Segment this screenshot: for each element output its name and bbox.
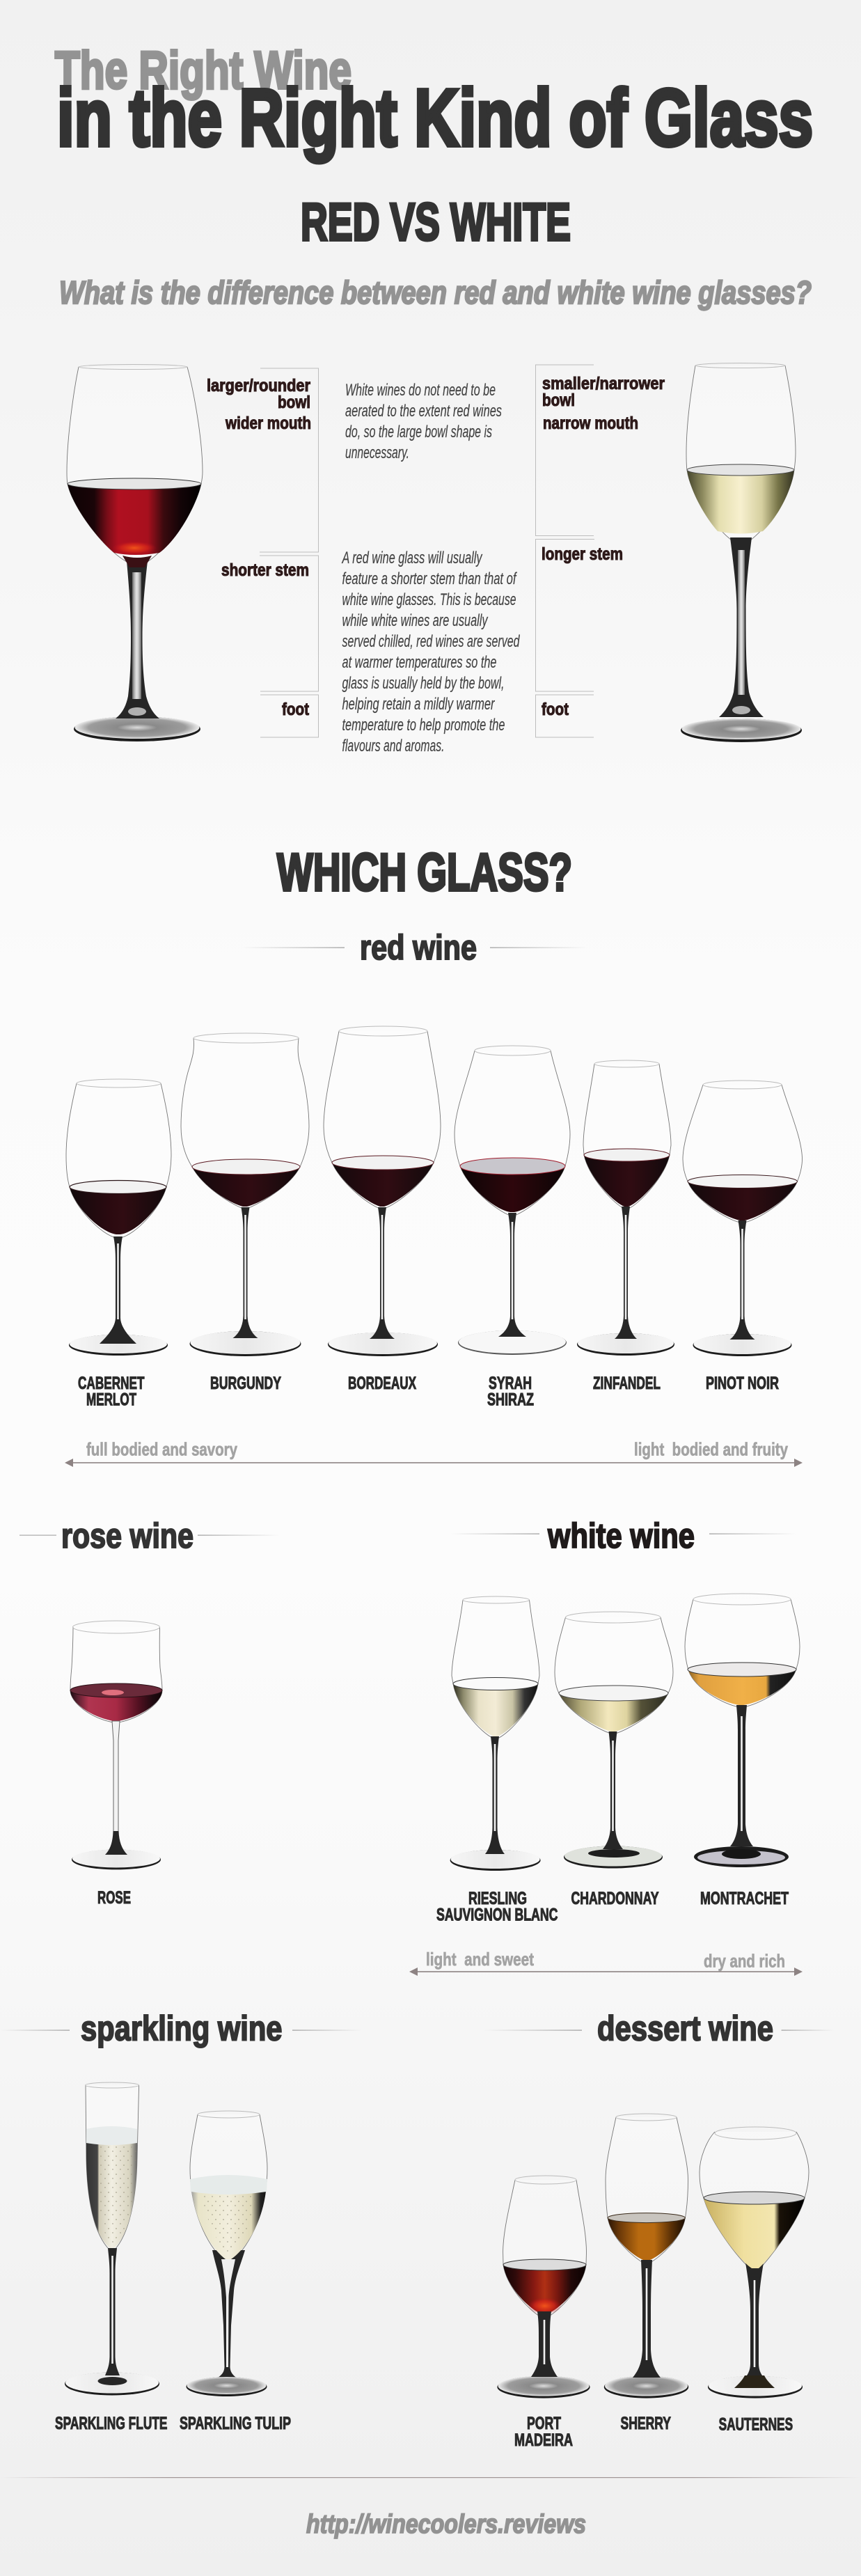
scale arrow: white wine sweetness (409, 1949, 803, 1976)
callout brackets: red glass (260, 368, 319, 737)
callout text: bowl and mouth of red glass: larger/rounder (207, 376, 310, 395)
heading: dessert wine: dessert wine (597, 2009, 773, 2048)
heading: red vs white: RED VS WHITE (301, 193, 571, 252)
text block: red wine stem explanation: feature a shorter stem than that of (342, 570, 517, 588)
callout text: foot of red glass: foot (282, 700, 310, 719)
callout text: bowl and mouth of white glass: smaller/narrower (542, 374, 665, 393)
title line: The Right Wine: The Right Wine (55, 41, 351, 100)
panel: red wine (65, 928, 803, 1467)
labels: red wine glasses: MERLOT (86, 1390, 136, 1409)
glass: cabernet merlot (66, 1079, 171, 1356)
text block: red wine stem explanation: temperature to help promote the (342, 716, 505, 735)
heading: red wine: red wine (360, 928, 477, 967)
text block: white wine bowl explanation (345, 381, 502, 462)
text block: white wine bowl explanation: do, so the large bowl shape is (345, 423, 492, 441)
scale arrow: white wine sweetness: dry and rich (704, 1951, 785, 1972)
labels: red wine glasses: CABERNET (78, 1374, 145, 1393)
heading: rose wine: rose wine (61, 1516, 193, 1555)
labels: white wine glasses: RIESLING (468, 1889, 527, 1908)
text block: white wine bowl explanation: White wines do not need to be (345, 381, 496, 400)
callout text: longer stem: longer stem (542, 544, 623, 564)
callout text: foot of white glass: foot (542, 700, 569, 719)
heading: which glass: WHICH GLASS? (277, 843, 572, 902)
text block: white wine bowl explanation: unnecessary. (345, 443, 409, 462)
labels: white wine glasses (436, 1889, 789, 1924)
text block: red wine stem explanation: glass is usually held by the bowl, (342, 674, 504, 693)
footer url: http://winecoolers.reviews (306, 2510, 586, 2539)
callout text: bowl and mouth of red glass: wider mouth (225, 414, 311, 433)
scale arrow: red wine body: light bodied and fruity (634, 1438, 788, 1459)
callout text: bowl and mouth of white glass: bowl (542, 391, 575, 410)
text block: red wine stem explanation (341, 549, 520, 755)
scale arrow: red wine body: full bodied and savory (86, 1438, 237, 1459)
callout brackets: white glass (536, 365, 594, 737)
panel: rose wine (19, 1516, 280, 1908)
labels: dessert wine glasses: PORT (527, 2414, 561, 2433)
labels: red wine glasses: SHIRAZ (487, 1390, 534, 1409)
glass: sauternes (700, 2127, 809, 2398)
labels: dessert wine glasses: SHERRY (621, 2414, 671, 2433)
labels: sparkling wine glasses: SPARKLING FLUTE (55, 2414, 167, 2433)
text block: red wine stem explanation: while white wines are usually (342, 611, 489, 630)
title (55, 41, 813, 163)
callout text: bowl and mouth of red glass: bowl (278, 393, 310, 412)
labels: sparkling wine glasses: SPARKLING TULIP (180, 2414, 291, 2433)
glass: sparkling tulip (187, 2111, 267, 2396)
text block: white wine bowl explanation: aerated to the extent red wines (345, 402, 502, 421)
labels: red wine glasses: BURGUNDY (210, 1374, 281, 1393)
labels: sparkling wine glasses (55, 2414, 291, 2433)
glass: burgundy (181, 1033, 309, 1356)
labels: white wine glasses: SAUVIGNON BLANC (436, 1905, 558, 1924)
label: rose: ROSE (97, 1888, 131, 1908)
panel: dessert wine (483, 2009, 835, 2450)
scale arrow: red wine body (65, 1438, 803, 1467)
glass: zinfandel (577, 1060, 674, 1356)
scale arrow: white wine sweetness: light and sweet (426, 1949, 534, 1970)
callout text: bowl and mouth of white glass (542, 374, 665, 433)
heading: white wine: white wine (547, 1516, 695, 1555)
icon: large white wine glass (681, 363, 802, 742)
glass: pinot noir (683, 1081, 802, 1356)
panel: red vs white comparison (67, 363, 802, 755)
panel: sparkling wine (0, 2009, 362, 2433)
heading: sparkling wine: sparkling wine (81, 2009, 283, 2048)
text block: red wine stem explanation: helping retain a mildly warmer (342, 695, 495, 714)
labels: white wine glasses: MONTRACHET (700, 1889, 789, 1908)
labels: red wine glasses: SYRAH (489, 1374, 532, 1393)
labels: red wine glasses (78, 1374, 779, 1409)
panel: white wine (409, 1516, 803, 1976)
callout text: bowl and mouth of red glass (207, 376, 311, 433)
glass: rose (70, 1621, 162, 1869)
callout text: bowl and mouth of white glass: narrow mouth (543, 414, 638, 433)
glass: bordeaux (324, 1026, 441, 1356)
labels: dessert wine glasses: SAUTERNES (719, 2414, 793, 2434)
text block: red wine stem explanation: at warmer temperatures so the (342, 653, 497, 672)
labels: red wine glasses: ZINFANDEL (593, 1374, 661, 1393)
glass: montrachet (685, 1594, 800, 1867)
glass: port madeira (497, 2176, 590, 2398)
labels: red wine glasses: PINOT NOIR (706, 1374, 779, 1393)
labels: dessert wine glasses: MADEIRA (514, 2430, 573, 2450)
labels: red wine glasses: BORDEAUX (348, 1374, 416, 1393)
glass: chardonnay (555, 1612, 673, 1869)
text block: red wine stem explanation: white wine glasses. This is because (342, 590, 516, 609)
callout text: shorter stem: shorter stem (221, 560, 309, 580)
glass: sparkling flute (65, 2082, 159, 2395)
glass: riesling sauvignon blanc (450, 1596, 541, 1871)
text block: red wine stem explanation: served chilled, red wines are served (342, 632, 520, 651)
glass: sherry (604, 2114, 688, 2398)
text block: red wine stem explanation: A red wine glass will usually (341, 549, 483, 567)
glass: syrah shiraz (455, 1046, 570, 1355)
icon: large red wine glass (67, 365, 203, 741)
labels: white wine glasses: CHARDONNAY (571, 1889, 659, 1908)
labels: dessert wine glasses (514, 2414, 793, 2450)
text block: red wine stem explanation: flavours and aromas. (342, 737, 444, 755)
